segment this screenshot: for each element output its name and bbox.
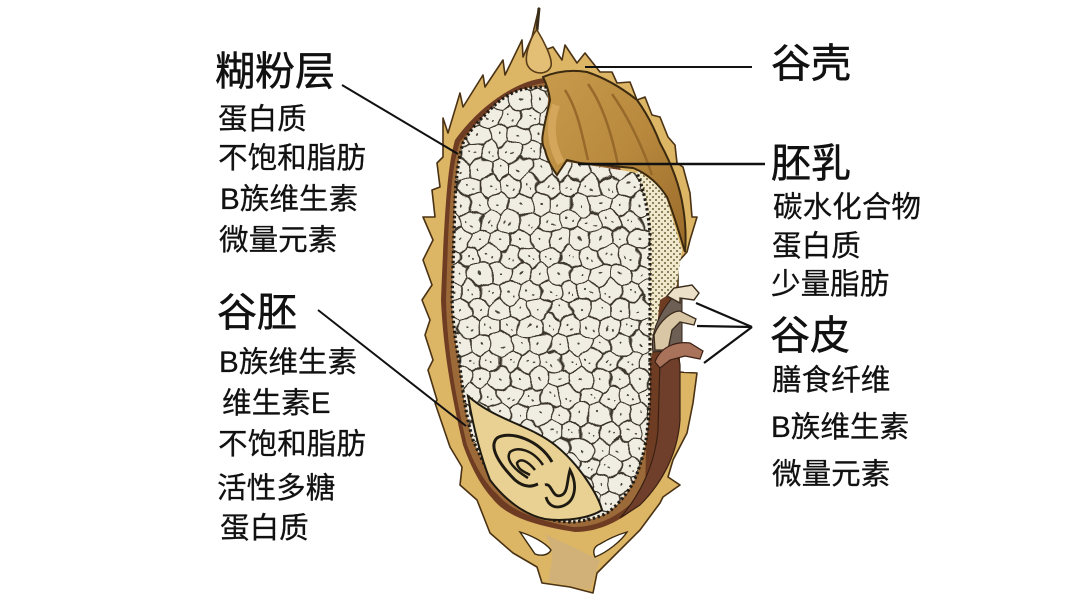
text: 微量元素 [772, 458, 890, 491]
text: 蛋白质 [772, 230, 861, 263]
heading: 谷皮: 谷皮 [770, 314, 850, 358]
leader line: 谷壳 [585, 66, 752, 68]
heading: 谷壳: 谷壳 [771, 42, 851, 86]
aleurone dotted layer [452, 87, 650, 522]
embryo [468, 396, 602, 520]
text: 胚乳 nutrients [771, 191, 921, 301]
text: 碳水化合物 [773, 191, 921, 224]
diagram: rice grain cross-section [317, 7, 765, 594]
text: 微量元素 [219, 224, 337, 257]
pale dotted outer endosperm [637, 170, 682, 360]
text: 不饱和脂肪 [218, 142, 366, 175]
text: 蛋白质 [220, 512, 309, 545]
heading: 胚乳: 胚乳 [771, 142, 851, 186]
text: B族维生素 [771, 411, 909, 444]
text: 维生素E [222, 387, 331, 420]
leader lines: 谷皮 [696, 303, 752, 363]
text: 少量脂肪 [771, 268, 889, 301]
bran flaps [652, 285, 703, 372]
text: 谷皮 nutrients [771, 364, 909, 491]
leader line: 谷胚 [318, 310, 466, 426]
heading: 谷胚: 谷胚 [217, 291, 297, 335]
text: B族维生素 [220, 183, 358, 216]
text: 蛋白质 [218, 103, 307, 136]
lemma flap [542, 71, 686, 252]
leader line: 胚乳 [578, 163, 765, 165]
text: B族维生素 [219, 346, 357, 379]
leader line: 糊粉层 [342, 85, 458, 154]
endosperm cells [452, 87, 650, 522]
heading: 糊粉层: 糊粉层 [215, 50, 335, 94]
glume white gaps [520, 532, 627, 557]
husk outer shell [422, 8, 697, 593]
text: 谷胚 nutrients [217, 346, 366, 545]
seed coat brown layers [441, 78, 680, 532]
text: 糊粉层 nutrients [218, 103, 366, 257]
text: 不饱和脂肪 [218, 428, 366, 461]
text: 膳食纤维 [772, 364, 890, 397]
text: 活性多糖 [217, 472, 335, 505]
